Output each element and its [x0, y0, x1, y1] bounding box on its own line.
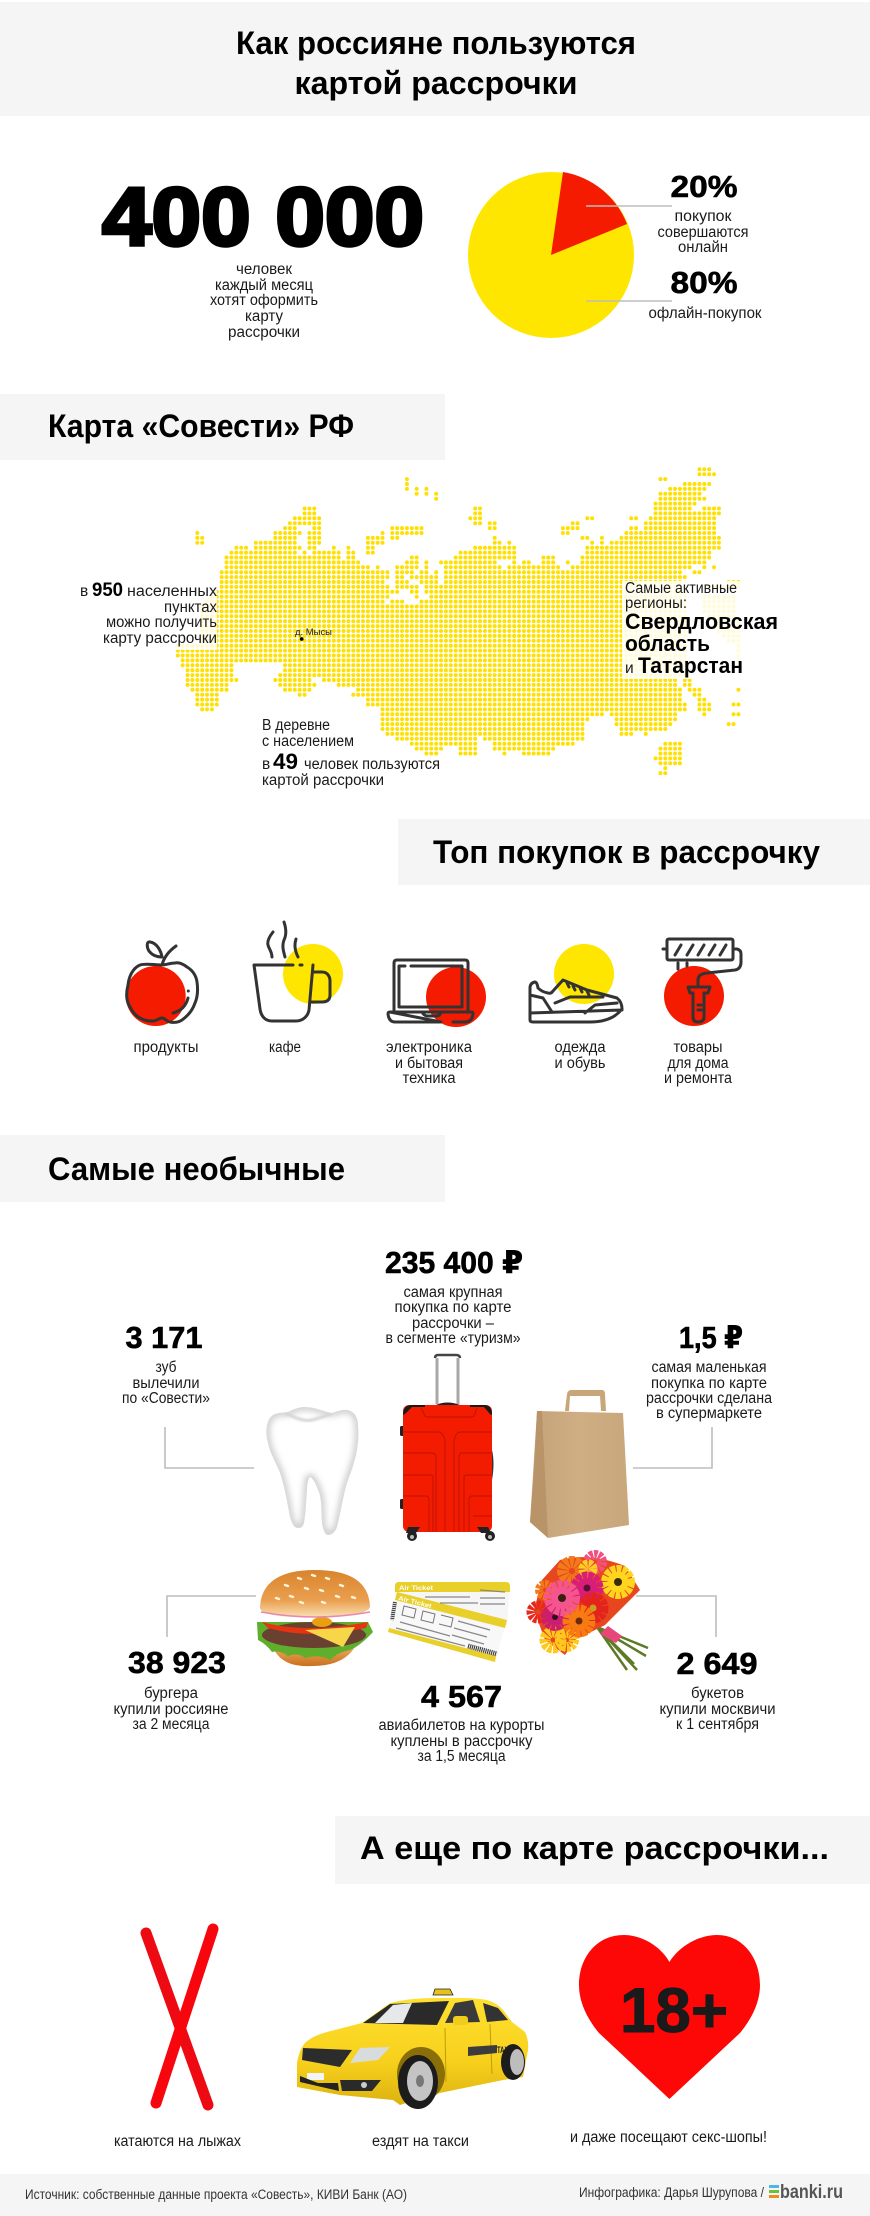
- pie chart: online vs offline: [468, 169, 762, 338]
- heading: most unusual: [0, 1135, 445, 1202]
- connector: bouquet: [636, 1596, 716, 1637]
- map label: village fact: в: [262, 756, 270, 773]
- label: clothes and shoes: одежда: [554, 1039, 606, 1056]
- label: sex shops: и даже посещают секс-шопы!: [570, 2129, 767, 2146]
- icon: sneaker: [530, 944, 622, 1022]
- image: gerbera bouquet: [531, 1555, 648, 1670]
- stat: burgers: 38 923: [128, 1645, 226, 1680]
- map label: active regions: Татарстан: [638, 653, 743, 678]
- stat: largest purchase: рассрочки –: [412, 1315, 494, 1332]
- map label: village fact: картой рассрочки: [262, 772, 384, 789]
- label: home goods: для дома: [668, 1055, 729, 1072]
- label: electronics: [386, 1039, 472, 1087]
- pie chart: online vs offline: 20%: [670, 169, 738, 204]
- icon: paint roller: [663, 939, 741, 1026]
- heading: also by card: [335, 1816, 870, 1884]
- label: home goods: [664, 1039, 732, 1087]
- pie chart: online vs offline: 80%: [670, 265, 738, 300]
- label: home goods: и ремонта: [664, 1070, 732, 1087]
- stat: smallest purchase: самая маленькая: [652, 1359, 766, 1376]
- stat: air tickets: [378, 1679, 544, 1765]
- big number: 400 000: 400 000: [102, 170, 424, 263]
- map label: settlements: [76, 578, 217, 650]
- label: taxi: ездят на такси: [372, 2133, 469, 2150]
- label: home goods: товары: [674, 1039, 722, 1056]
- title band: [0, 2, 870, 116]
- pie chart: online vs offline: офлайн-покупок: [648, 305, 762, 322]
- map marker: village Mysy: д. Мысы: [295, 627, 332, 638]
- title band: картой рассрочки: [294, 65, 578, 101]
- stat: largest purchase: 235 400 ₽: [385, 1245, 523, 1280]
- image: red skis: [146, 1929, 213, 2105]
- map label: settlements: в: [80, 583, 88, 600]
- pie chart: online vs offline: совершаются: [658, 224, 748, 241]
- image: heart with 18+: 18+: [620, 1976, 728, 2046]
- map label: settlements: пунктах: [164, 599, 217, 616]
- image: yellow taxi: [297, 1989, 528, 2109]
- icon: coffee cup: [254, 922, 343, 1021]
- stat: largest purchase: самая крупная: [404, 1284, 502, 1301]
- heading: map: [0, 394, 445, 460]
- label: cafe: кафе: [269, 1039, 301, 1056]
- stat: smallest purchase: покупка по карте: [651, 1375, 767, 1392]
- map label: active regions: Свердловская: [625, 609, 778, 634]
- map label: settlements: карту рассрочки: [103, 630, 217, 647]
- map label: village fact: 49: [273, 749, 298, 774]
- stat: bouquets: 2 649: [676, 1646, 758, 1681]
- stat: largest purchase: [385, 1245, 523, 1347]
- image: yellow taxi: TAXI: [497, 2045, 510, 2055]
- label: electronics: и бытовая: [395, 1055, 463, 1072]
- stat: burgers: бургера: [144, 1685, 198, 1702]
- stat: air tickets: 4 567: [421, 1679, 502, 1714]
- map label: village fact: человек пользуются: [304, 756, 440, 773]
- image: air tickets: Air Ticket: [398, 1595, 433, 1610]
- stat: burgers: за 2 месяца: [132, 1716, 210, 1733]
- icon: laptop: [388, 960, 486, 1027]
- label: electronics: электроника: [386, 1039, 472, 1056]
- pie chart: online vs offline: онлайн: [678, 239, 728, 256]
- stat: burgers: [114, 1645, 228, 1733]
- label: clothes and shoes: [554, 1039, 606, 1072]
- big number: 400 000: карту: [245, 308, 283, 325]
- map label: active regions: регионы:: [625, 595, 687, 612]
- heading: top purchases: Топ покупок в рассрочку: [433, 834, 820, 870]
- footer band: Источник: собственные данные проекта «Совесть», КИВИ Банк (АО): [25, 2187, 407, 2202]
- stat: smallest purchase: 1,5 ₽: [679, 1320, 743, 1355]
- stat: smallest purchase: [646, 1320, 772, 1422]
- stat: bouquets: букетов: [691, 1685, 744, 1702]
- map label: active regions: и: [625, 660, 634, 677]
- stat: air tickets: авиабилетов на курорты: [378, 1717, 544, 1734]
- stat: teeth: по «Совести»: [122, 1390, 210, 1407]
- stat: smallest purchase: в супермаркете: [656, 1405, 762, 1422]
- icon: apple: [126, 942, 198, 1026]
- label: clothes and shoes: и обувь: [554, 1055, 606, 1072]
- big number: 400 000: хотят оформить: [210, 292, 318, 309]
- big number: 400 000: каждый месяц: [215, 277, 313, 294]
- heading: also by card: А еще по карте рассрочки...: [360, 1830, 829, 1866]
- connector: bag: [633, 1427, 712, 1468]
- stat: bouquets: купили москвичи: [660, 1701, 776, 1718]
- stat: teeth: 3 171: [126, 1320, 202, 1355]
- big number: 400 000: [102, 170, 424, 341]
- heading: most unusual: Самые необычные: [48, 1151, 345, 1187]
- big number: 400 000: рассрочки: [228, 324, 300, 341]
- image: burger: [257, 1570, 373, 1666]
- heading: map: Карта «Совести» РФ: [48, 408, 354, 444]
- image: heart with 18+: [579, 1935, 760, 2099]
- map label: village fact: В деревне: [262, 717, 330, 734]
- label: skiing: катаются на лыжах: [114, 2133, 241, 2150]
- stat: air tickets: за 1,5 месяца: [418, 1748, 506, 1765]
- stat: largest purchase: покупка по карте: [394, 1299, 512, 1316]
- connector: burger: [167, 1596, 256, 1637]
- stat: smallest purchase: рассрочки сделана: [646, 1390, 772, 1407]
- heading: top purchases: [398, 819, 870, 885]
- footer band: Инфографика: Дарья Шурупова /: [579, 2185, 764, 2200]
- stat: burgers: купили россияне: [114, 1701, 228, 1718]
- title band: Как россияне пользуются: [236, 25, 636, 61]
- label: electronics: техника: [402, 1070, 456, 1087]
- map label: settlements: 950: [92, 580, 123, 601]
- image: tooth: [266, 1407, 358, 1535]
- map label: settlements: можно получить: [106, 614, 217, 631]
- map label: village fact: с населением: [262, 733, 354, 750]
- map label: settlements: населенных: [127, 583, 217, 600]
- stat: teeth: вылечили: [132, 1375, 200, 1392]
- big number: 400 000: человек: [236, 261, 292, 278]
- stat: bouquets: к 1 сентября: [676, 1716, 759, 1733]
- pie chart: online vs offline: покупок: [674, 208, 732, 225]
- label: products: продукты: [134, 1039, 198, 1056]
- map label: village fact: [262, 717, 440, 789]
- stat: largest purchase: в сегменте «туризм»: [386, 1330, 520, 1347]
- stat: bouquets: [660, 1646, 776, 1733]
- footer band: banki.ru: [780, 2182, 843, 2203]
- stat: air tickets: куплены в рассрочку: [390, 1733, 533, 1750]
- footer band: [0, 2174, 870, 2216]
- connector: tooth: [165, 1427, 254, 1468]
- image: air tickets: Air Ticket: [399, 1585, 434, 1592]
- stat: teeth: зуб: [156, 1359, 177, 1376]
- image: red suitcase: [400, 1355, 495, 1541]
- map label: active regions: [622, 580, 780, 679]
- map label: active regions: Самые активные: [625, 580, 737, 597]
- image: air tickets: [388, 1582, 510, 1662]
- dot map of Russia: [178, 469, 738, 773]
- image: paper bag: [530, 1390, 629, 1538]
- stat: teeth: [122, 1320, 210, 1407]
- map label: active regions: область: [625, 631, 710, 656]
